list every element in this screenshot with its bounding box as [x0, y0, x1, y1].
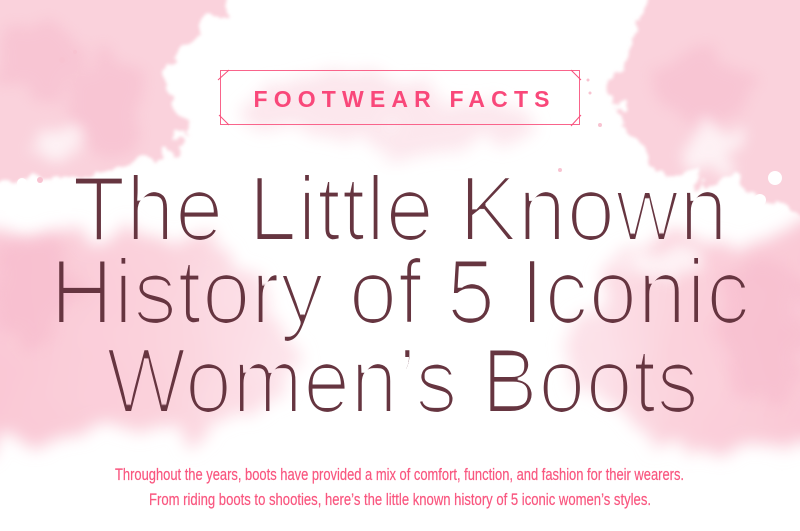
badge: footwear facts [218, 70, 581, 126]
title: History of 5 Iconic [50, 242, 750, 343]
title: The Little Known [72, 159, 728, 260]
title [50, 159, 750, 432]
badge frame [218, 70, 581, 126]
title: Women’s Boots [106, 331, 699, 432]
intro text: From riding boots to shooties, here’s the little known history of 5 iconic women’s styles. [149, 490, 651, 509]
intro text [115, 465, 684, 509]
badge label: FOOTWEAR FACTS [254, 86, 550, 112]
